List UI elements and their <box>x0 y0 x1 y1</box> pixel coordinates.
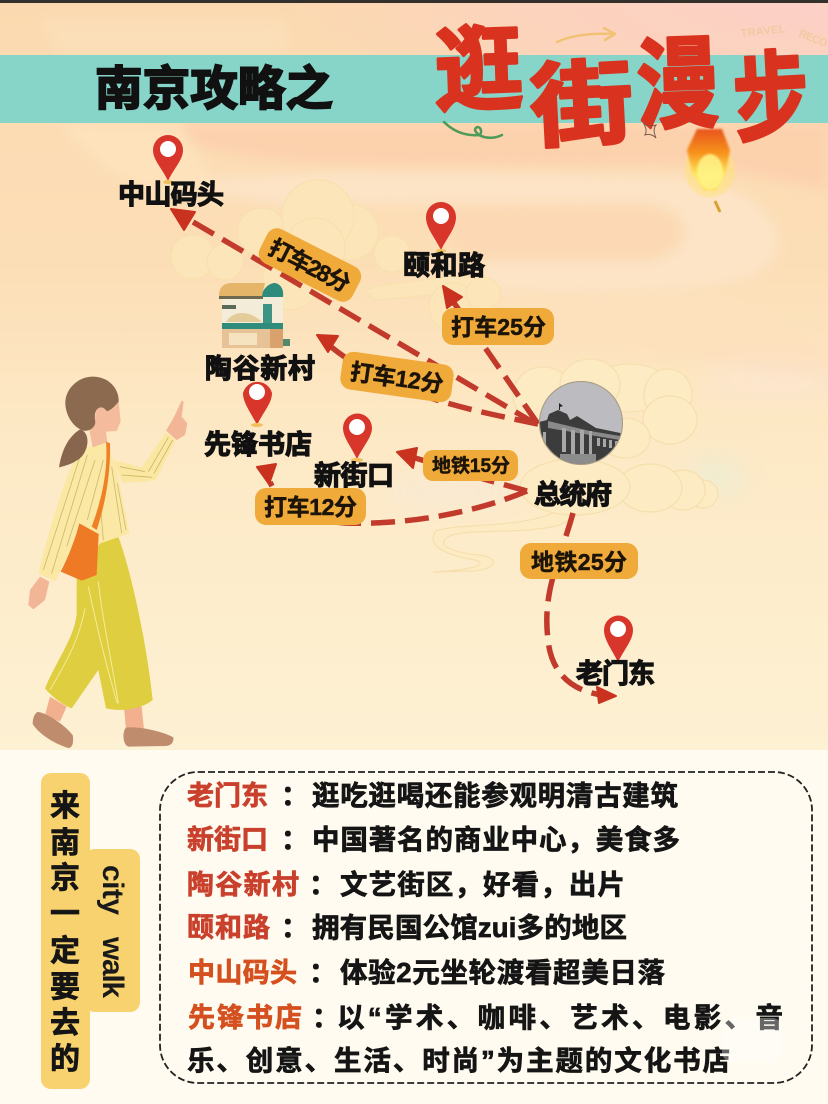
pin: 新街口 <box>343 414 372 462</box>
background <box>0 0 828 750</box>
bag strap <box>92 442 110 530</box>
hair <box>65 377 119 431</box>
lower panel background <box>0 750 828 1104</box>
pants <box>45 537 153 710</box>
label: 中山码头: 中山码头 <box>118 180 224 210</box>
row: 陶谷新村: ： <box>309 869 336 900</box>
row: 陶谷新村: 文艺街区，好看，出片 <box>340 869 625 900</box>
arrow: to 先锋书店 <box>257 464 527 523</box>
title band <box>0 55 828 123</box>
vertical tag: 来南京一定要去的: 一 <box>50 898 80 931</box>
badge: 打车28分: 打车28分 <box>264 234 355 297</box>
badge: 打车25分: 打车25分 <box>451 314 546 340</box>
label: 总统府: 总统府 <box>534 480 612 510</box>
badge: 地铁25分 <box>520 543 638 579</box>
big title: 逛街漫步: 步 <box>730 43 812 155</box>
row: 老门东: ： <box>281 780 308 811</box>
pin: 老门东 <box>604 616 633 662</box>
badge: 地铁15分 <box>423 450 518 481</box>
row: 中山码头: 体验2元坐轮渡看超美日落 <box>340 957 666 988</box>
arrow: to 新街口 <box>397 448 527 491</box>
decoration: arrow above title <box>557 28 615 42</box>
hand <box>166 401 187 440</box>
vertical tag: 来南京一定要去的: 来 <box>50 790 80 823</box>
row: continuation: 乐、创意、生活、时尚”为主题的文化书店 <box>187 1045 730 1076</box>
label: 新街口: 新街口 <box>314 461 394 491</box>
row: 先锋书店: ： <box>312 1002 340 1033</box>
vertical tag: 来南京一定要去的 <box>41 773 140 1089</box>
arrow: to 陶谷新村 <box>317 335 538 424</box>
row: 颐和路: 拥有民国公馆zui多的地区 <box>312 912 627 943</box>
row: 先锋书店: 以“学术、咖啡、艺术、电影、音 <box>337 1002 783 1033</box>
big title: 逛街漫步 <box>433 18 812 160</box>
badge: 打车25分 <box>442 308 554 345</box>
tag tab: city walk <box>85 849 140 1012</box>
watermark <box>722 1018 782 1062</box>
icon: sky lantern <box>685 129 735 212</box>
row: 颐和路: 颐和路 <box>187 913 270 943</box>
vertical tag: 来南京一定要去的: 京 <box>50 862 80 895</box>
arm <box>113 433 176 483</box>
icon: 陶谷新村 storefront <box>219 283 290 348</box>
decoration: travel text <box>740 23 828 50</box>
pin: 先锋书店 <box>243 382 272 427</box>
vertical tag: 来南京一定要去的: 要 <box>50 971 80 1004</box>
badge: 地铁15分: 地铁15分 <box>432 455 510 477</box>
sweater <box>38 442 129 582</box>
vertical tag: 来南京一定要去的: 定 <box>50 935 80 968</box>
big title: 逛街漫步: 街 <box>528 52 636 160</box>
decoration: sparkle <box>644 124 656 138</box>
row: 新街口: ： <box>281 824 308 855</box>
row: 陶谷新村: 陶谷新村 <box>187 870 299 900</box>
vertical tag: 来南京一定要去的: 南 <box>50 827 80 860</box>
row: 中山码头: 中山码头 <box>188 958 297 988</box>
neck and face <box>89 402 121 447</box>
top dark edge <box>0 0 828 3</box>
ponytail <box>59 429 87 467</box>
label: 陶谷新村: 陶谷新村 <box>205 354 315 384</box>
clouds: upper <box>171 180 500 331</box>
badge: 打车12分 lower <box>255 488 366 525</box>
badge: 打车12分 lower: 打车12分 <box>264 494 357 520</box>
clouds: right <box>433 359 718 572</box>
pin: 颐和路 <box>426 202 456 253</box>
row: 先锋书店: 先锋书店 <box>188 1003 302 1033</box>
row: 老门东: 逛吃逛喝还能参观明清古建筑 <box>312 780 678 811</box>
photo: 总统府 building <box>539 381 625 470</box>
row: 中山码头 <box>188 957 666 988</box>
big title: 逛街漫步: 漫 <box>635 29 721 143</box>
panel: place descriptions <box>160 772 812 1083</box>
decoration: travel text: TRAVEL <box>740 23 786 40</box>
badge: 打车28分 <box>255 224 365 306</box>
vertical tag: 来南京一定要去的: 的 <box>50 1043 80 1076</box>
pin: 中山码头 <box>153 135 183 184</box>
tag tab: city walk: city <box>96 865 129 915</box>
label: 先锋书店: 先锋书店 <box>204 430 312 460</box>
badge: 地铁25分: 地铁25分 <box>531 549 627 575</box>
label: 老门东: 老门东 <box>576 659 655 689</box>
place labels <box>118 180 655 689</box>
shoes <box>33 712 173 748</box>
bag <box>61 523 99 581</box>
arrow: to 中山码头 <box>171 209 536 424</box>
illustration: walking woman <box>28 377 187 748</box>
title: 南京攻略之: 南京攻略之 <box>95 62 333 115</box>
row: 中山码头: ： <box>309 957 336 988</box>
arrow: to 颐和路 <box>443 286 538 424</box>
row: 新街口: 新街口 <box>187 825 268 855</box>
route arrows <box>171 209 616 703</box>
arrow: to 老门东 <box>547 513 616 703</box>
row: 颐和路: ： <box>281 912 308 943</box>
row: 新街口: 中国著名的商业中心，美食多 <box>312 824 680 855</box>
tag tab: city walk: walk <box>96 936 129 998</box>
legs <box>45 697 144 730</box>
rear hand <box>28 577 49 609</box>
row: 老门东: 老门东 <box>187 781 268 811</box>
vertical tag: 来南京一定要去的: 去 <box>50 1007 80 1040</box>
big title: 逛街漫步: 逛 <box>433 18 525 124</box>
badge: 打车12分 upper: 打车12分 <box>349 359 445 397</box>
row: 陶谷新村 <box>187 869 625 900</box>
label: 颐和路: 颐和路 <box>403 251 485 281</box>
decoration: green curl <box>444 122 502 138</box>
badge: 打车12分 upper <box>339 350 455 404</box>
